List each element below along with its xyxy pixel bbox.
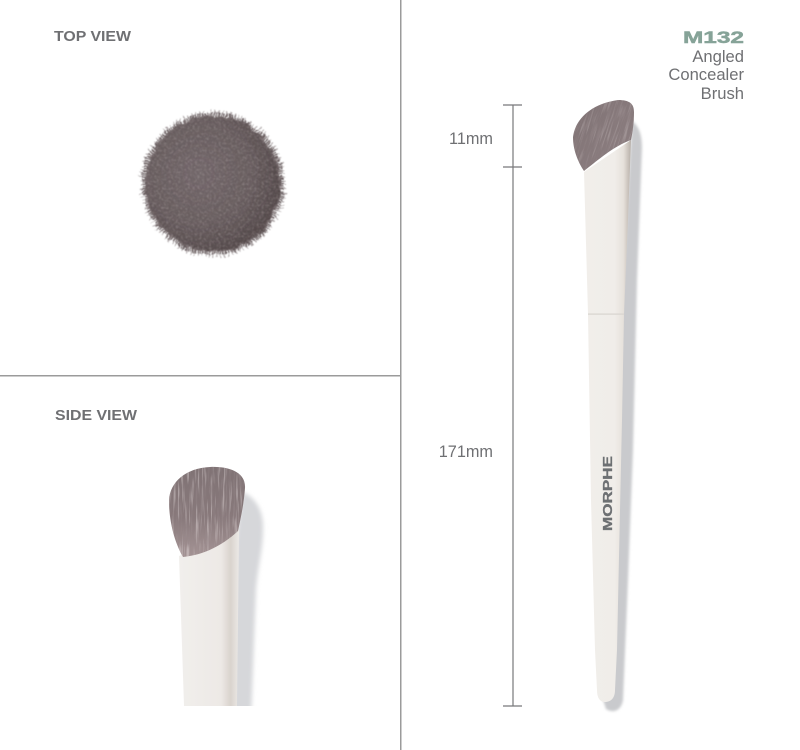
full brush — [573, 100, 643, 712]
panel: side view — [55, 408, 263, 720]
product name: Brush — [701, 84, 744, 103]
panel dividers — [0, 0, 402, 750]
bristles — [573, 100, 634, 171]
product code: M132 — [683, 28, 744, 47]
brush head seen from above — [140, 112, 286, 258]
heading: top view: TOP VIEW — [54, 29, 131, 45]
shadow — [237, 492, 265, 706]
ferrule seam — [588, 314, 624, 315]
brand name on handle: MORPHE — [601, 456, 615, 531]
handle — [584, 140, 631, 702]
product name: Concealer — [668, 65, 744, 84]
product title — [668, 28, 744, 103]
panel: top view — [54, 29, 286, 258]
handle — [179, 530, 239, 706]
side view brush close-up — [165, 462, 263, 720]
product name: Angled — [692, 47, 744, 66]
panel: full brush — [439, 28, 744, 711]
heading: side view: SIDE VIEW — [55, 408, 137, 424]
label: handle length: 171mm — [439, 443, 493, 461]
dimension scale — [439, 105, 522, 706]
bristles — [169, 466, 246, 557]
label: bristle length: 11mm — [449, 130, 493, 148]
shadow — [600, 121, 642, 711]
